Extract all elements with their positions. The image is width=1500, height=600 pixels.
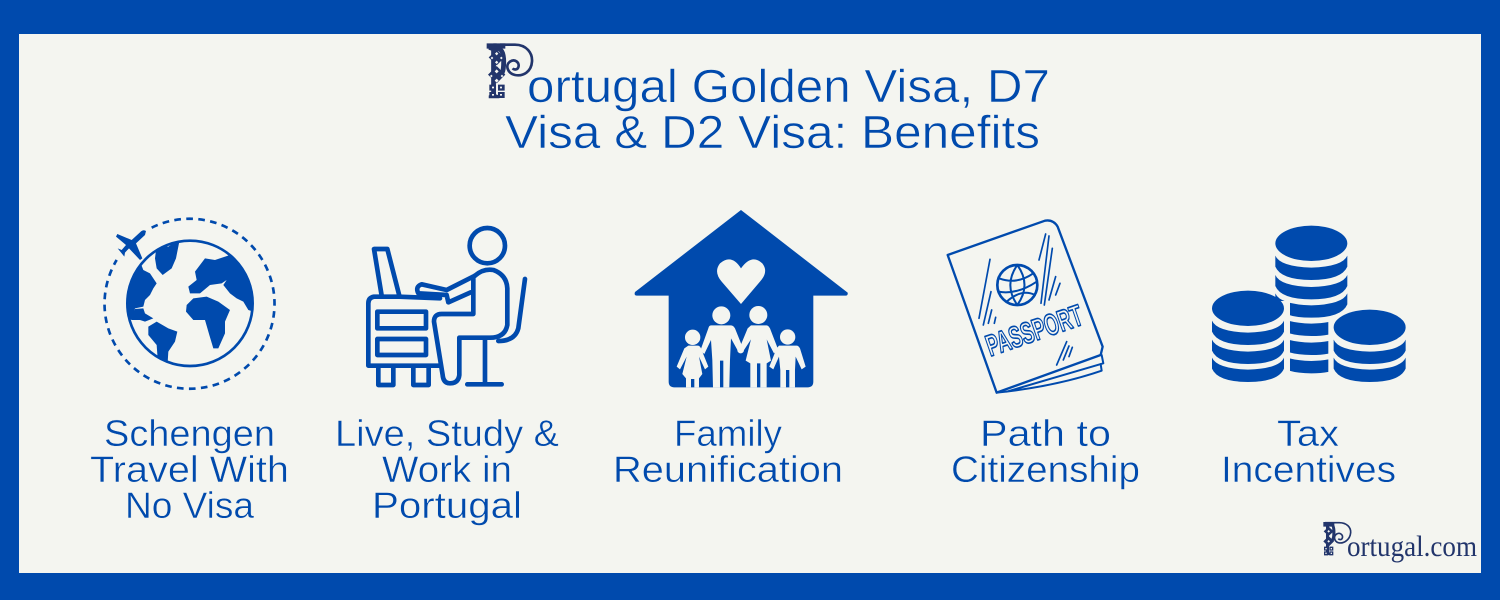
label: Tax Incentives [1221,413,1396,490]
label: Tax Incentives: Tax [1277,413,1340,454]
label: Schengen Travel With No Visa: Travel With [90,449,289,490]
logo: Portugal.com: ortugal.com [1347,530,1477,563]
label: Schengen Travel With No Visa: No Visa [125,485,254,526]
logo: Portugal.com [1323,510,1477,566]
icon: coin stacks [1212,226,1406,382]
label: Path to Citizenship: Citizenship [951,449,1140,490]
title: Visa & D2 Visa: Benefits [505,106,1040,158]
label: Path to Citizenship: Path to [980,413,1111,454]
label: Live, Study & Work in Portugal [335,413,559,526]
icon: plane [116,230,146,260]
icon: person working at desk [368,228,525,385]
icon: family in house [635,210,848,387]
label: Path to Citizenship [951,413,1140,490]
label: Live, Study & Work in Portugal: Live, Study & [335,413,559,454]
title [487,28,1050,158]
label: Live, Study & Work in Portugal: Work in [382,449,512,490]
label: Tax Incentives: Incentives [1221,449,1396,490]
icon: globe with plane [105,219,275,389]
label: Family Reunification: Reunification [613,449,843,490]
icon: passport: PASSPORT [982,299,1087,363]
label: Live, Study & Work in Portugal: Portugal [372,485,522,526]
icon: passport [948,220,1103,393]
label: Family Reunification [613,413,843,490]
icon: ornamental initial P: P [488,28,507,115]
label: Schengen Travel With No Visa [90,413,289,526]
label: Family Reunification: Family [674,413,782,454]
logo: Portugal.com: P [1324,510,1336,566]
label: Schengen Travel With No Visa: Schengen [104,413,275,454]
title: ortugal Golden Visa, D7 [527,60,1050,112]
